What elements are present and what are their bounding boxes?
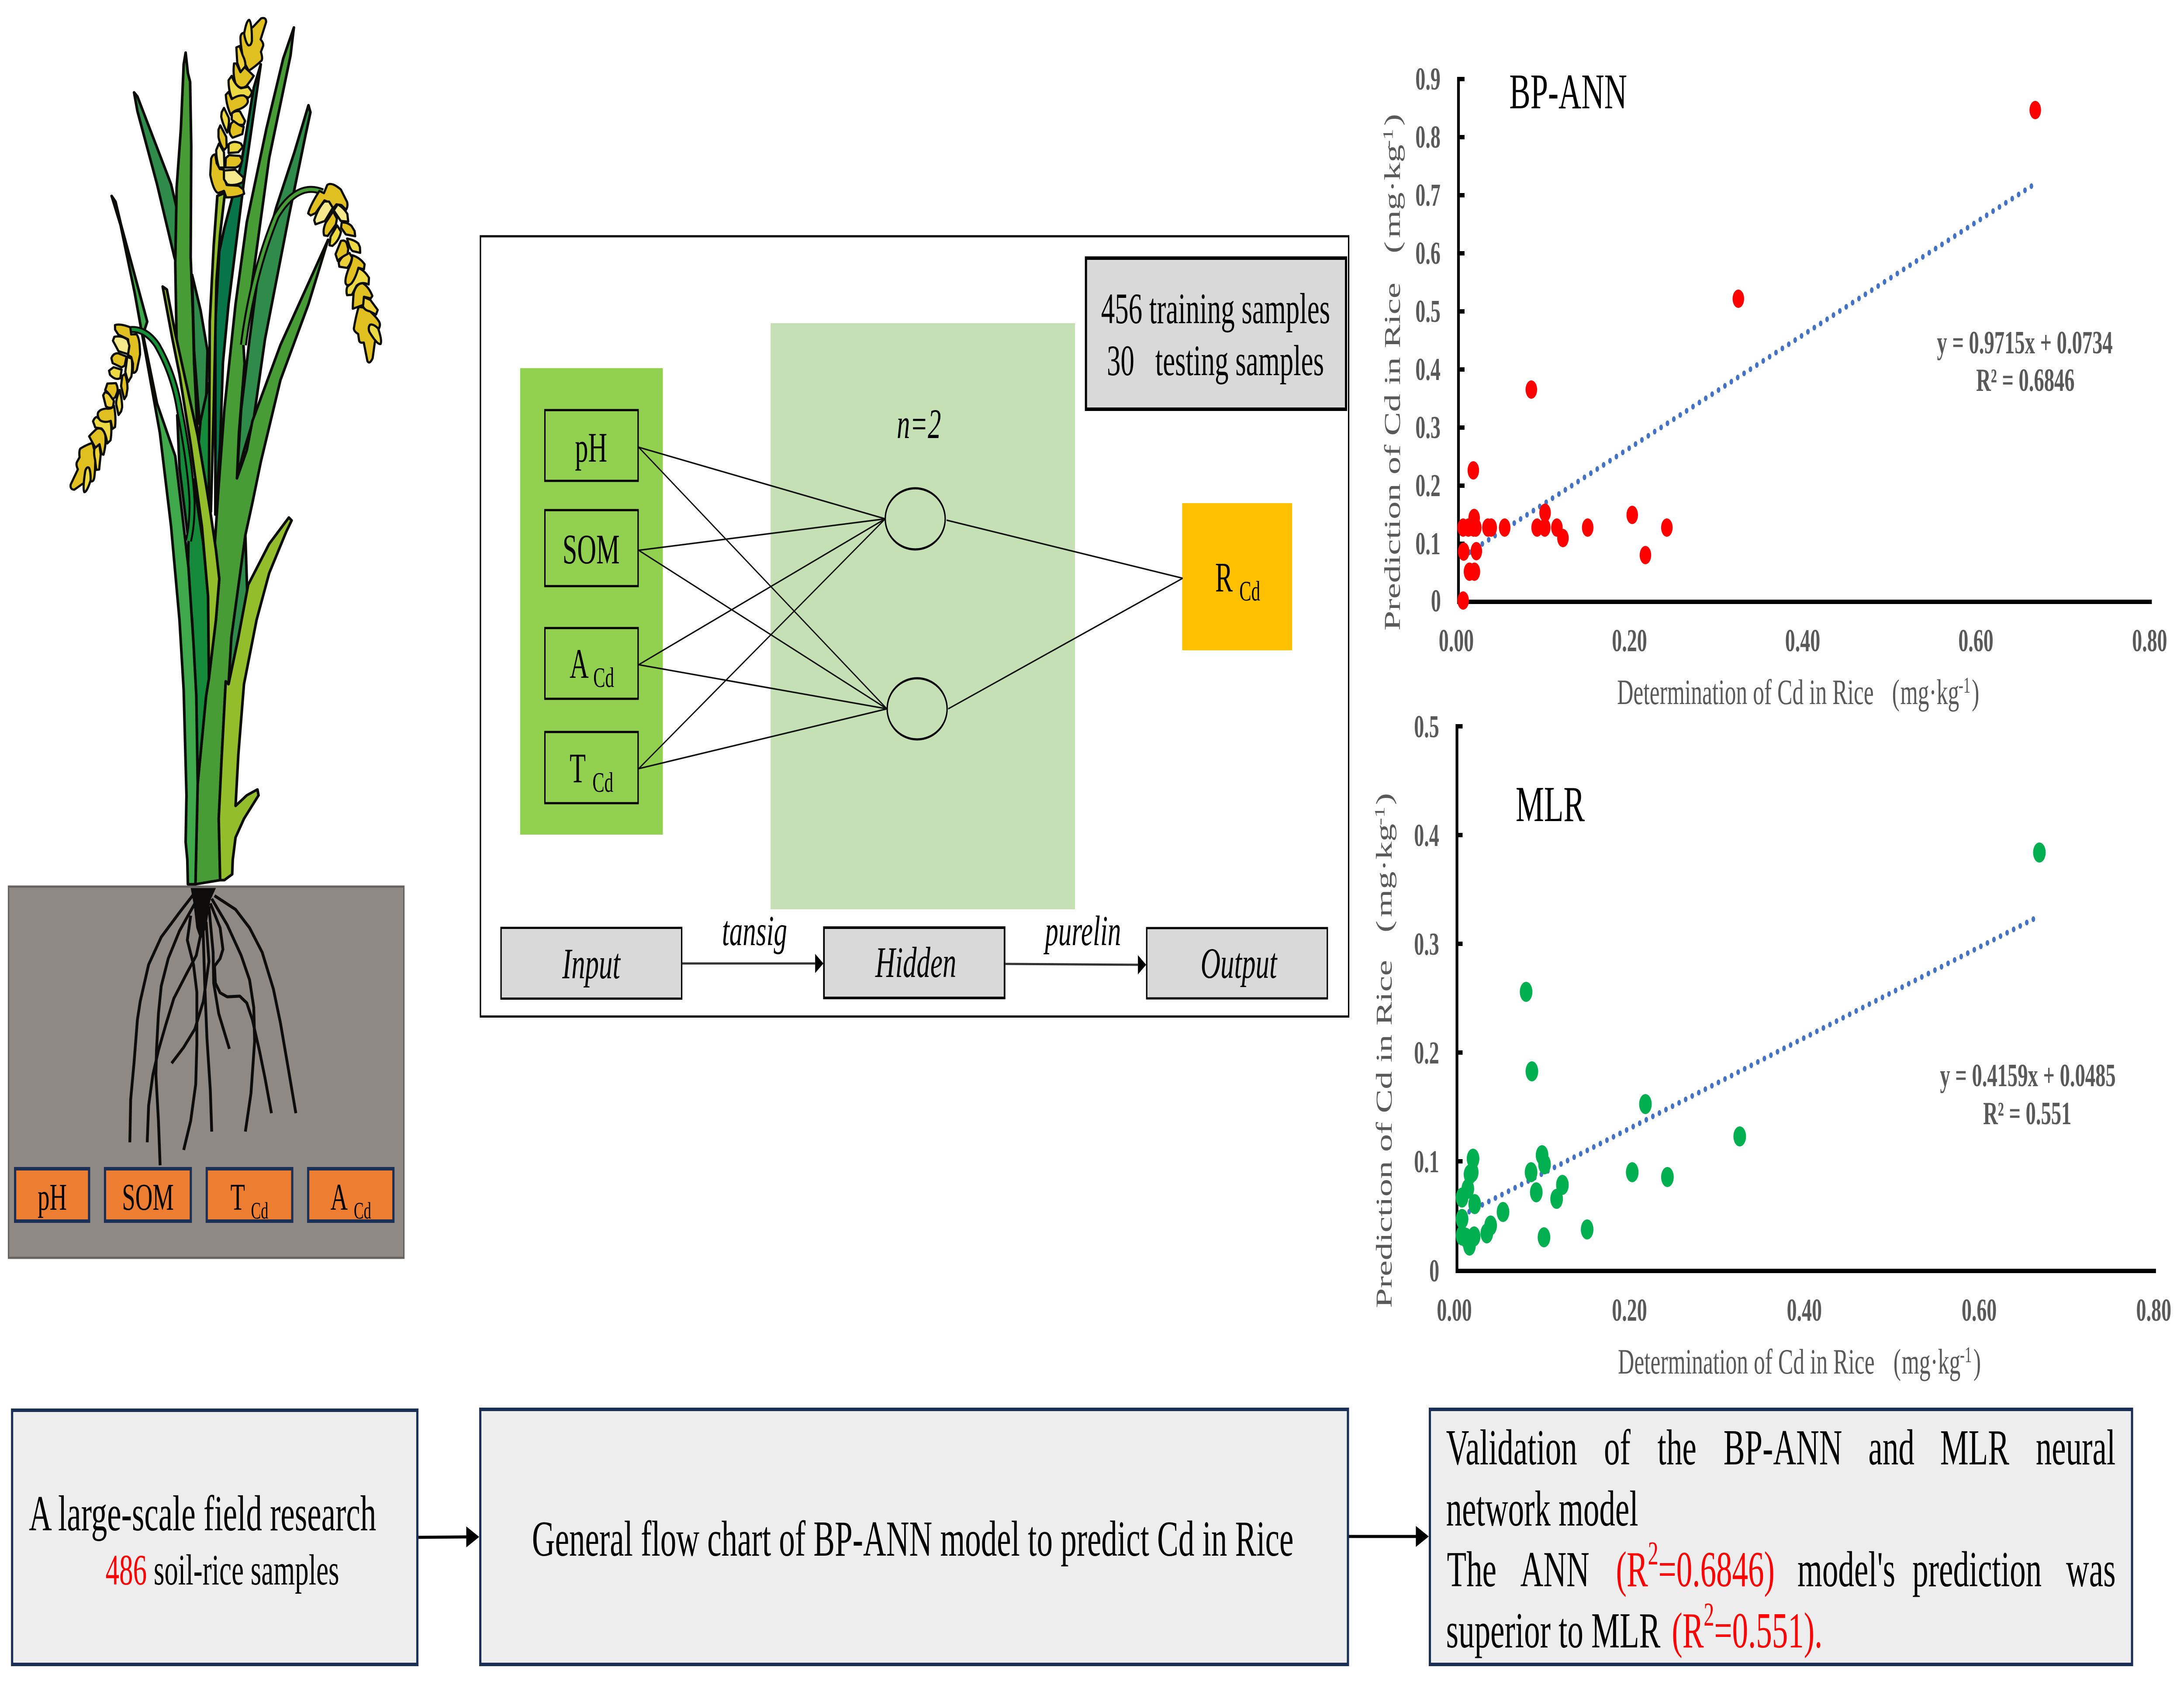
x axis tick labels: 0.00: [1437, 1293, 1472, 1328]
y axis title: ): [1380, 114, 1405, 126]
y axis title: [1380, 114, 1405, 631]
icon: right rice ear: [291, 173, 409, 364]
layer box: Output: [1147, 928, 1327, 998]
y axis title: Prediction of Cd in Rice: [1372, 960, 1396, 1308]
y axis tick labels: 0.8: [1415, 120, 1441, 155]
y axis tick labels: 0.9: [1415, 62, 1441, 97]
label: pH: pH: [38, 1176, 67, 1218]
y axis tick labels: 0.7: [1415, 178, 1441, 213]
flow box: validation conclusion: of: [1604, 1419, 1631, 1475]
input layer background: [520, 368, 663, 835]
x axis title: (: [1894, 1342, 1901, 1381]
soil panel: [9, 887, 404, 1258]
x axis tick labels: 0.60: [1958, 624, 1994, 659]
flow box: validation conclusion: 2: [1648, 1535, 1659, 1572]
input: A Cd: A: [570, 641, 589, 687]
scatter chart: BP-ANN: [1380, 62, 2167, 712]
x axis tick labels: 0.80: [2136, 1293, 2171, 1328]
icon: rice plant: [70, 18, 409, 884]
x axis title: ): [1972, 672, 1979, 712]
y axis title: Prediction of Cd in Rice: [1380, 283, 1405, 631]
x axis tick labels: 0.40: [1787, 1293, 1822, 1328]
y axis tick labels: 0.5: [1415, 294, 1441, 329]
input: T Cd: T: [570, 746, 586, 792]
y axis tick labels: 0.1: [1414, 1145, 1439, 1180]
layer box: Hidden: [824, 928, 1005, 998]
x axis title: -1: [1959, 673, 1970, 698]
flow box: validation conclusion: (R: [1616, 1541, 1648, 1597]
layer box: Hidden: Hidden: [875, 939, 956, 987]
label: T Cd: T: [230, 1176, 245, 1218]
scatter chart: MLR: [1372, 710, 2171, 1381]
flow box: validation conclusion: [1430, 1409, 2132, 1664]
flow box: validation conclusion: superior to MLR: [1446, 1602, 1661, 1658]
icon: left rice ear: [70, 314, 144, 507]
icon: rice roots: [130, 888, 296, 1165]
y axis tick labels: [1414, 710, 1439, 1289]
flow box: field research: A large-scale field research: [29, 1485, 376, 1541]
arrow: hidden to output with purelin: [1005, 908, 1146, 974]
flow box: validation conclusion: ANN: [1521, 1541, 1590, 1597]
flow box: validation conclusion: network model: [1446, 1481, 1638, 1536]
flow box: validation conclusion: prediction: [1912, 1541, 2042, 1597]
input: pH: [545, 410, 638, 481]
x axis title: mg·kg: [1902, 1342, 1960, 1381]
arrow: input to hidden with tansig: tansig: [722, 908, 787, 955]
flow box: validation conclusion: model's: [1797, 1541, 1895, 1597]
flow box: validation conclusion: Validation: [1446, 1419, 1577, 1475]
arrow: flow chart to validation: [1349, 1526, 1429, 1547]
y axis tick labels: 0: [1431, 584, 1441, 619]
y axis tick labels: [1415, 62, 1441, 619]
x axis tick labels: [1439, 624, 2167, 659]
y axis tick labels: 0.3: [1414, 927, 1439, 962]
input: T Cd: Cd: [592, 767, 613, 798]
y axis title: [1372, 793, 1396, 1308]
flow box: validation conclusion: (R: [1672, 1602, 1704, 1658]
flow box: BP-ANN flow chart: General flow chart of BP-ANN model to predict Cd in Rice: [532, 1511, 1293, 1567]
label: T Cd: [207, 1169, 292, 1224]
y axis title: ): [1372, 793, 1396, 805]
x axis tick labels: 0.40: [1785, 624, 1820, 659]
network connections: [639, 447, 1183, 769]
input: T Cd: [545, 732, 638, 803]
output node: R Cd: Cd: [1239, 576, 1260, 607]
y axis tick labels: 0.3: [1415, 411, 1441, 445]
y axis tick labels: 0.1: [1415, 527, 1441, 562]
y axis tick labels: 0: [1429, 1254, 1439, 1289]
hidden node 2: [887, 678, 947, 739]
label: A Cd: Cd: [354, 1198, 371, 1224]
label: T Cd: Cd: [251, 1198, 268, 1224]
input: A Cd: [545, 628, 638, 699]
hidden node 1: [885, 488, 945, 549]
flow box: validation conclusion: the: [1658, 1419, 1697, 1475]
axes: [1457, 77, 2152, 604]
chart title: BP-ANN: [1509, 63, 1627, 119]
hidden layer background: [771, 323, 1075, 909]
x axis tick labels: [1437, 1293, 2171, 1328]
regression equation: [1940, 1058, 2116, 1132]
output node: R Cd: [1182, 503, 1292, 650]
y axis title: (: [1380, 242, 1405, 253]
flow box: field research: [12, 1410, 417, 1664]
y axis tick labels: 0.4: [1415, 352, 1441, 387]
input: A Cd: Cd: [593, 662, 614, 693]
arrow: research to flow chart: [418, 1526, 479, 1547]
input: SOM: SOM: [563, 527, 620, 573]
sample count box: 456 training samples: [1101, 285, 1330, 333]
input: pH: pH: [575, 425, 607, 471]
y axis title: -1: [1380, 129, 1396, 148]
sample count box: 30: [1107, 337, 1134, 385]
y axis tick labels: 0.5: [1414, 710, 1439, 745]
layer box: Input: Input: [562, 940, 621, 988]
x axis title: (: [1892, 672, 1900, 712]
x axis title: -1: [1960, 1343, 1972, 1367]
y axis tick labels: 0.4: [1414, 818, 1439, 853]
input: SOM: [545, 510, 638, 586]
arrow: hidden to output with purelin: purelin: [1044, 908, 1121, 955]
x axis title: Determination of Cd in Rice: [1617, 672, 1874, 712]
flow box: validation conclusion: neural: [2036, 1419, 2115, 1475]
sample count box: [1086, 258, 1346, 409]
icon: top rice ear: [210, 18, 266, 197]
x axis tick labels: 0.60: [1962, 1293, 1997, 1328]
axes: [1456, 724, 2156, 1273]
y axis tick labels: 0.2: [1415, 469, 1441, 504]
y axis title: mg·kg: [1380, 145, 1405, 238]
flow box: validation conclusion: and: [1868, 1419, 1914, 1475]
flow box: validation conclusion: BP-ANN: [1724, 1419, 1842, 1475]
label: SOM: [105, 1169, 191, 1221]
flow box: field research: 486 soil-rice samples: [106, 1547, 339, 1595]
y axis title: -1: [1372, 807, 1388, 825]
flow box: validation conclusion: =0.551).: [1714, 1602, 1822, 1658]
flow box: validation conclusion: The: [1447, 1541, 1496, 1597]
trend line: [1462, 917, 2038, 1215]
sample count box: testing samples: [1155, 337, 1324, 385]
x axis title: ): [1973, 1342, 1981, 1381]
x axis tick labels: 0.20: [1612, 1293, 1647, 1328]
label: pH: [15, 1169, 89, 1221]
x axis tick labels: 0.80: [2132, 624, 2167, 659]
regression equation: y = 0.9715x + 0.0734: [1937, 325, 2113, 361]
x axis title: Determination of Cd in Rice: [1618, 1342, 1875, 1381]
x axis tick labels: 0.20: [1612, 624, 1647, 659]
x axis tick labels: 0.00: [1439, 624, 1474, 659]
data points: [1456, 842, 2046, 1256]
regression equation: R² = 0.551: [1983, 1096, 2071, 1132]
label: SOM: SOM: [122, 1176, 174, 1218]
layer box: Input: [501, 928, 682, 998]
plant leaves and stems: [112, 28, 328, 884]
label: n=2: n=2: [897, 401, 941, 448]
chart title: MLR: [1516, 776, 1585, 832]
label: A Cd: A: [331, 1176, 348, 1218]
flow box: BP-ANN flow chart: [480, 1409, 1348, 1664]
trend line: [1463, 183, 2037, 556]
x axis title: mg·kg: [1900, 672, 1959, 712]
soil factor labels: [15, 1169, 394, 1224]
flow box: validation conclusion: was: [2066, 1541, 2116, 1597]
output node: R Cd: R: [1215, 555, 1233, 601]
regression equation: y = 0.4159x + 0.0485: [1940, 1058, 2116, 1094]
y axis tick labels: 0.2: [1414, 1036, 1439, 1071]
arrow: input to hidden with tansig: [682, 908, 823, 973]
y axis title: (: [1372, 921, 1396, 932]
flow box: validation conclusion: 2: [1704, 1596, 1714, 1633]
data points: [1457, 101, 2041, 610]
y axis tick labels: 0.6: [1415, 236, 1441, 271]
regression equation: [1937, 325, 2113, 398]
label: A Cd: [308, 1169, 394, 1224]
flow box: validation conclusion: =0.6846): [1659, 1541, 1775, 1597]
flow box: validation conclusion: MLR: [1940, 1419, 2009, 1475]
regression equation: R² = 0.6846: [1976, 362, 2075, 398]
layer box: Output: Output: [1201, 940, 1278, 988]
panel: BP-ANN network diagram: [480, 236, 1349, 1017]
y axis title: mg·kg: [1372, 824, 1396, 917]
